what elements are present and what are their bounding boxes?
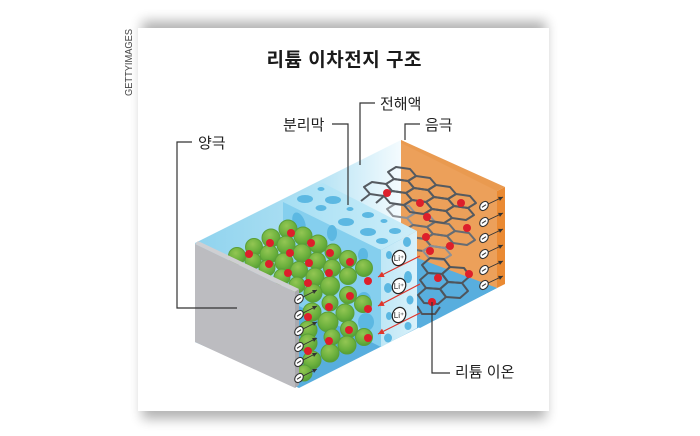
lithium ion arrows — [378, 256, 420, 334]
separator pores — [290, 187, 414, 342]
cathode spheres — [228, 220, 372, 381]
lithium ions — [245, 189, 473, 355]
electron arrows right — [486, 197, 503, 284]
leader lines — [177, 103, 450, 373]
label: cathode: 양극 — [198, 135, 226, 152]
electrons left — [293, 293, 305, 384]
label: lithium ion: 리튬 이온 — [455, 364, 514, 381]
label: separator: 분리막 — [283, 117, 325, 134]
photo credit: GETTYIMAGES — [123, 29, 135, 96]
graphene layer bottom — [417, 258, 470, 314]
title: 리튬 이차전지 구조 — [266, 49, 422, 71]
graphene layer middle — [387, 204, 475, 260]
cathode plate: gray — [195, 241, 299, 388]
paper shadow — [142, 21, 546, 419]
label: anode: 음극 — [425, 117, 453, 134]
separator block — [283, 183, 417, 347]
paper panel — [138, 28, 549, 411]
Li+ badges — [390, 248, 408, 325]
anode plate: orange — [401, 140, 505, 288]
graphene layer top — [361, 167, 476, 223]
floor of battery case — [195, 238, 497, 388]
label: electrolyte: 전해액 — [380, 96, 421, 113]
electron arrows left — [301, 290, 317, 377]
floor overlap under anode — [401, 258, 497, 328]
electrons right — [478, 200, 490, 291]
back wall: electrolyte — [195, 140, 401, 342]
battery diagram — [195, 140, 505, 388]
